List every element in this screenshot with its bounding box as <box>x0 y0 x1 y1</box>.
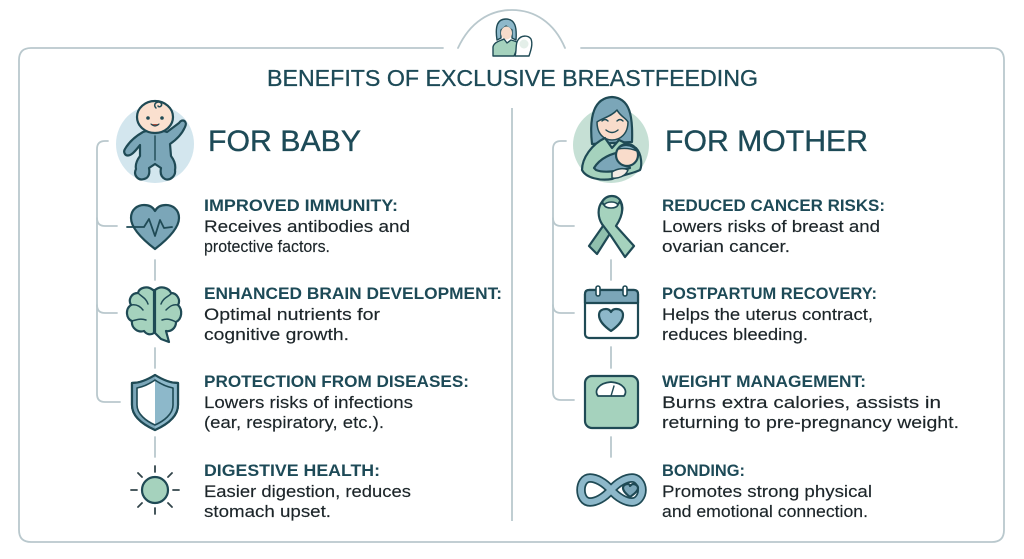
text: postpartum recovery: POSTPARTUM RECOVERY: <box>662 284 877 303</box>
text: improved immunity: Receives antibodies and <box>204 217 410 236</box>
text: enhanced brain development: ENHANCED BRAIN DEVELOPMENT: <box>204 284 502 303</box>
panel: for baby <box>97 101 502 521</box>
icon: scale <box>585 376 638 428</box>
text: reduced cancer risks: Lowers risks of breast and <box>662 217 880 236</box>
icon: ribbon <box>589 196 634 257</box>
title: BENEFITS OF EXCLUSIVE BREASTFEEDING <box>267 65 758 91</box>
icon: mother and baby <box>573 97 649 183</box>
panel: for mother <box>553 97 959 521</box>
text: weight management: WEIGHT MANAGEMENT: <box>662 372 866 391</box>
icon: heart with pulse <box>127 205 179 249</box>
text: digestive health <box>204 461 411 521</box>
text: enhanced brain development: Optimal nutrients for <box>204 305 380 324</box>
text: postpartum recovery <box>662 284 877 344</box>
text: weight management: Burns extra calories, assists in <box>662 393 941 412</box>
bracket: mother <box>553 141 611 457</box>
text: improved immunity: IMPROVED IMMUNITY: <box>204 196 398 215</box>
icon: infinity with heart <box>581 478 642 502</box>
text: bonding: and emotional connection. <box>662 502 868 521</box>
text: postpartum recovery: reduces bleeding. <box>662 325 808 344</box>
text: bonding: Promotes strong physical <box>662 482 872 501</box>
text: digestive health: stomach upset. <box>204 502 331 521</box>
icon: brain <box>127 287 181 342</box>
icon: calendar <box>585 286 638 338</box>
text: protection from diseases: Lowers risks of infections <box>204 393 413 412</box>
text: reduced cancer risks: REDUCED CANCER RISKS: <box>662 196 885 215</box>
text: reduced cancer risks: ovarian cancer. <box>662 237 790 256</box>
text: improved immunity: protective factors. <box>204 237 330 256</box>
text: bonding: BONDING: <box>662 461 745 480</box>
icon: baby <box>116 101 194 183</box>
text: digestive health: Easier digestion, reduces <box>204 482 411 501</box>
text: bonding <box>662 461 872 521</box>
heading: for mother: FOR MOTHER <box>665 125 868 158</box>
icon: sun <box>131 466 179 514</box>
text: weight management <box>662 372 959 432</box>
text: digestive health: DIGESTIVE HEALTH: <box>204 461 380 480</box>
bracket: baby <box>97 141 155 457</box>
text: improved immunity <box>204 196 410 256</box>
icon: shield <box>132 375 178 430</box>
text: protection from diseases: PROTECTION FROM DISEASES: <box>204 372 469 391</box>
text: enhanced brain development <box>204 284 502 344</box>
text: weight management: returning to pre-pregnancy weight. <box>662 413 959 432</box>
text: reduced cancer risks <box>662 196 885 256</box>
center divider <box>511 108 513 521</box>
text: protection from diseases <box>204 372 469 432</box>
text: enhanced brain development: cognitive growth. <box>204 325 349 344</box>
icon: top mother and baby <box>493 19 532 56</box>
heading: for baby: FOR BABY <box>208 125 361 158</box>
text: protection from diseases: (ear, respiratory, etc.). <box>204 413 384 432</box>
text: postpartum recovery: Helps the uterus contract, <box>662 305 873 324</box>
